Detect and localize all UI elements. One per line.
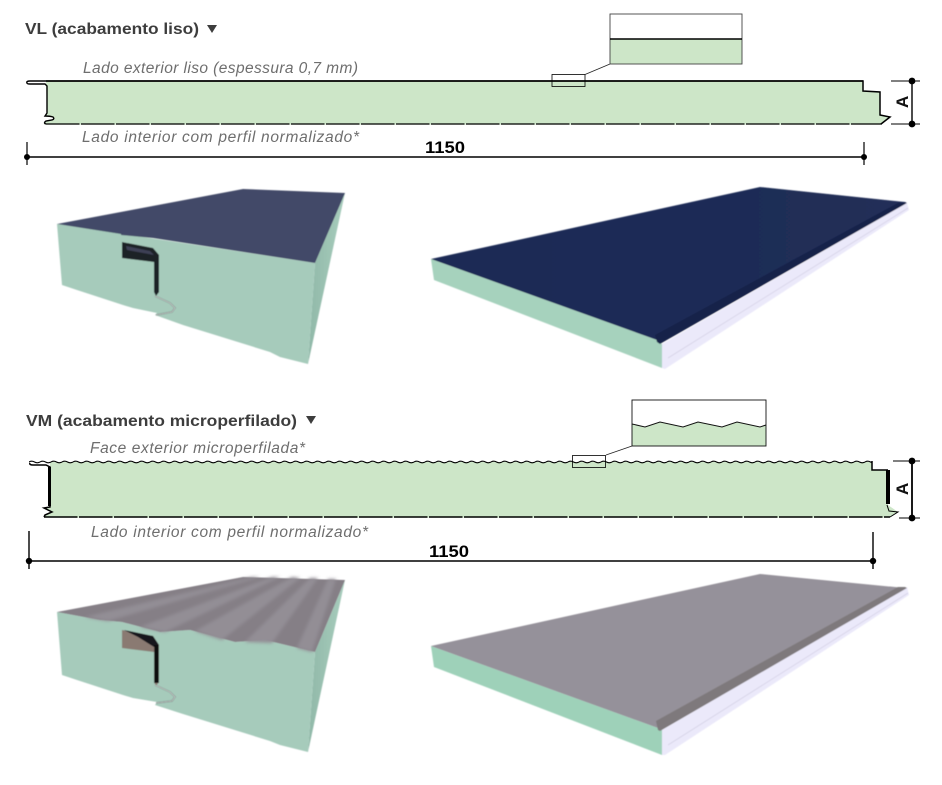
heading: VM: VM (acabamento microperfilado) [26, 413, 297, 430]
profile section VM [29, 458, 898, 518]
section: VL smooth finish [24, 14, 920, 369]
detail inset VM [572, 400, 766, 468]
3D cut panel grey [57, 577, 345, 752]
section: VM microprofiled finish [26, 400, 920, 755]
heading: VL: VL (acabamento liso) [25, 21, 199, 38]
dimension A VM [893, 458, 920, 521]
label: exterior side: Lado exterior liso (espessura 0,7 mm) [83, 60, 358, 77]
dimension A VL [891, 78, 920, 127]
dimension 1150 VL: 1150 [425, 139, 465, 157]
dimension A VL: A [893, 96, 912, 108]
profile section VL [27, 81, 890, 125]
3D cut panel navy [57, 189, 345, 364]
label: exterior face: Face exterior microperfilada* [90, 440, 306, 457]
dimension A VM: A [893, 483, 912, 495]
3D long panel grey [431, 574, 909, 755]
label: interior side: Lado interior com perfil normalizado* [82, 129, 360, 146]
label: interior side: Lado interior com perfil normalizado* [91, 524, 369, 541]
dimension 1150 VM: 1150 [429, 543, 469, 561]
dimension 1150 VM [26, 531, 876, 569]
detail inset VL [552, 14, 742, 86]
3D long panel navy [431, 187, 909, 369]
dimension 1150 VL [24, 139, 867, 165]
